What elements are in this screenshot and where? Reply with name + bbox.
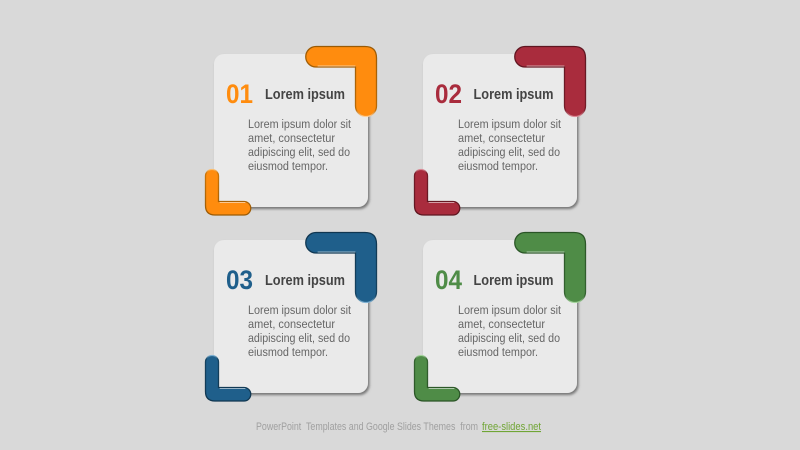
card background: [423, 54, 577, 207]
heading: Lorem ipsum: [474, 87, 554, 103]
heading: Lorem ipsum: [265, 273, 345, 289]
number 03: 03: [226, 265, 253, 295]
panel: card 02: [414, 46, 586, 215]
body text: Lorem ipsum dolor sit: [248, 303, 352, 317]
body text: adipiscing elit, sed do: [458, 145, 560, 159]
body text: amet, consectetur: [458, 131, 545, 145]
card background: [423, 240, 577, 393]
body text: eiusmod tempor.: [458, 345, 538, 359]
body text: Lorem ipsum dolor sit: [458, 117, 562, 131]
body text: adipiscing elit, sed do: [248, 331, 350, 345]
bottom-left red bracket: [414, 170, 460, 215]
panel: card 04: [414, 232, 586, 401]
body text: amet, consectetur: [458, 317, 545, 331]
footer credit: free-slides.net: [482, 421, 541, 433]
bottom-left orange bracket: [206, 170, 251, 215]
body text: Lorem ipsum dolor sit: [248, 117, 352, 131]
body text: eiusmod tempor.: [248, 345, 328, 359]
footer credit: PowerPoint Templates and Google Slides Themes from: [256, 421, 478, 433]
body text: adipiscing elit, sed do: [248, 145, 350, 159]
panel: card 03: [206, 232, 376, 401]
body text: amet, consectetur: [248, 131, 335, 145]
body text: [248, 117, 352, 173]
number 04: 04: [435, 265, 462, 295]
card background: [214, 54, 368, 207]
heading: Lorem ipsum: [265, 87, 345, 103]
top-right orange bracket: [306, 46, 376, 117]
top-right red bracket: [515, 46, 586, 117]
heading: Lorem ipsum: [474, 273, 554, 289]
body text: adipiscing elit, sed do: [458, 331, 560, 345]
panel: card 01: [206, 46, 376, 215]
top-right blue bracket: [306, 232, 376, 302]
bottom-left green bracket: [414, 356, 460, 401]
body text: Lorem ipsum dolor sit: [458, 303, 562, 317]
body text: [248, 303, 352, 359]
number 02: 02: [435, 79, 462, 109]
bottom-left blue bracket: [206, 356, 251, 401]
body text: amet, consectetur: [248, 317, 335, 331]
top-right green bracket: [515, 232, 586, 302]
number 01: 01: [226, 79, 253, 109]
body text: eiusmod tempor.: [248, 159, 328, 173]
body text: [458, 303, 562, 359]
body text: [458, 117, 562, 173]
card background: [214, 240, 368, 393]
body text: eiusmod tempor.: [458, 159, 538, 173]
